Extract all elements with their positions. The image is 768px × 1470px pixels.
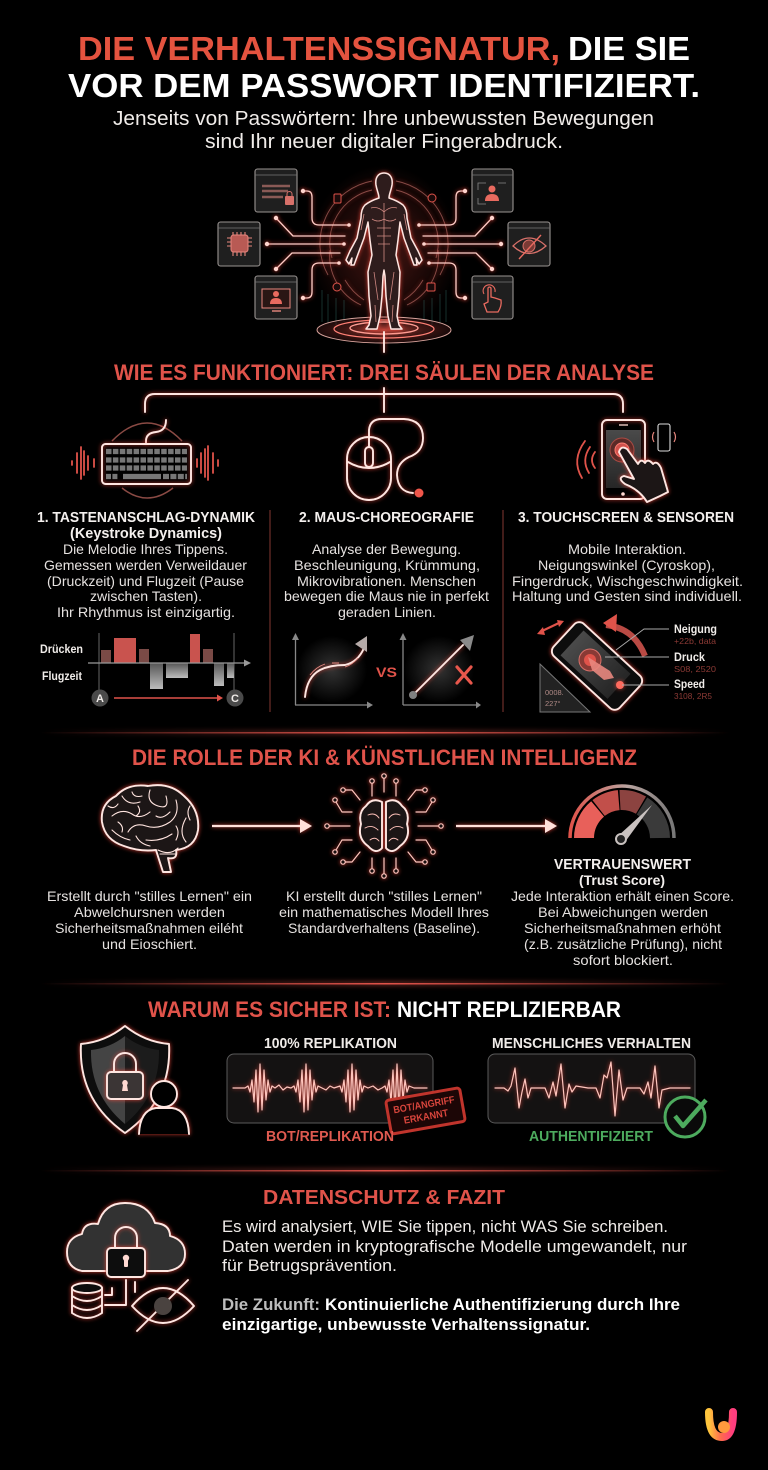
column text: Analyse der Bewegung.	[312, 541, 461, 557]
section divider	[40, 1168, 730, 1173]
chart: press and flight time: Flugzeit	[42, 671, 82, 683]
text: model: Standardverhaltens (Baseline).	[288, 920, 480, 936]
window: monitor with user	[255, 276, 297, 319]
bracket connector	[145, 388, 623, 412]
sensor labels: Neigung	[674, 624, 717, 636]
column text: Mikrovibrationen. Menschen	[297, 573, 476, 589]
text: conclusion: Kontinuierliche Authentifizierung durch Ihre	[325, 1296, 680, 1314]
text: score: sofort blockiert.	[573, 952, 673, 968]
window: chip	[218, 222, 260, 266]
label: replication: 100% REPLIKATION	[264, 1036, 397, 1052]
icon: tilted phone with sensors: 227°	[545, 699, 561, 708]
chart: press and flight time: A	[96, 693, 104, 705]
heading: why it is secure: WARUM ES SICHER IST:	[148, 997, 391, 1022]
column text: bewegen die Maus nie in perfekt	[284, 588, 489, 604]
icon: tilted phone with sensors	[537, 614, 669, 713]
column heading: (Keystroke Dynamics)	[70, 526, 222, 542]
chart: press and flight time: Drücken	[40, 644, 83, 656]
text: privacy: für Betrugsprävention.	[222, 1257, 397, 1275]
column text: Fingerdruck, Wischgeschwindigkeit.	[512, 573, 743, 589]
text: privacy: Daten werden in kryptografische Modelle umgewandelt, nur	[222, 1238, 688, 1256]
icon: brain	[102, 785, 198, 872]
left connectors	[267, 191, 348, 298]
stamp: bot attack detected: BOT/ANGRIFF	[393, 1095, 456, 1116]
connector dots	[265, 189, 503, 300]
heading: why it is secure	[148, 997, 621, 1022]
text: score	[511, 888, 734, 968]
column heading	[37, 510, 256, 542]
text: privacy	[222, 1218, 688, 1275]
text: score: Sicherheitsmaßnahmen erhöht	[524, 920, 721, 936]
icon: tilted phone with sensors: 0008.	[545, 688, 564, 697]
trust score heading	[554, 857, 691, 888]
label: human behaviour: MENSCHLICHES VERHALTEN	[492, 1036, 691, 1052]
text: conclusion: einzigartige, unbewusste Verhaltenssignatur.	[222, 1316, 590, 1334]
sensor labels: 3108, 2R5	[674, 691, 712, 701]
column text: zwischen Tasten).	[90, 588, 202, 604]
panel: AI role	[47, 774, 734, 968]
trust score heading: (Trust Score)	[579, 872, 665, 888]
text: privacy: Es wird analysiert, WIE Sie tippen, nicht WAS Sie schreiben.	[222, 1218, 668, 1236]
text: model	[279, 888, 489, 936]
chart: press and flight time: C	[231, 693, 239, 705]
heading: how it works: WIE ES FUNKTIONIERT: DREI SÄULEN DER ANALYSE	[114, 360, 654, 385]
panel: not replicable	[81, 1026, 706, 1145]
icon: sound waves	[72, 446, 218, 480]
icon: phone with touch	[577, 420, 676, 502]
chart: human waveform	[488, 1054, 695, 1123]
text: learning: Erstellt durch "stilles Lernen" ein	[47, 888, 252, 904]
text: learning: und Eioschiert.	[102, 936, 197, 952]
subtitle	[113, 108, 654, 153]
column heading: 3. TOUCHSCREEN & SENSOREN	[518, 510, 734, 526]
window: touch hand	[472, 276, 513, 319]
sensor labels: Speed	[674, 679, 705, 691]
window: crossed eye	[508, 222, 550, 266]
text: score: Jede Interaktion erhält einen Score.	[511, 888, 734, 904]
right connectors	[420, 191, 501, 298]
sensor labels: +22b, data	[674, 636, 716, 646]
text: learning: Abwelchursnen werden	[74, 904, 225, 920]
label: authenticated: AUTHENTIFIZIERT	[529, 1129, 653, 1145]
section divider	[40, 981, 730, 986]
orbit rings	[320, 181, 448, 305]
column divider	[270, 510, 503, 712]
icon: cloud lock database eye	[67, 1203, 194, 1331]
arrow	[212, 819, 312, 833]
panel: touchscreen and sensors	[512, 420, 743, 713]
text: score: Bei Abweichungen werden	[538, 904, 708, 920]
panel: mouse choreography	[284, 419, 489, 708]
heading: role of AI: DIE ROLLE DER KI & KÜNSTLICHEN INTELLIGENZ	[132, 745, 637, 770]
column text: Neigungswinkel (Cyroskop),	[538, 557, 715, 573]
column text: Mobile Interaktion.	[568, 541, 686, 557]
section divider	[40, 730, 730, 735]
text: conclusion	[222, 1296, 680, 1334]
panel: keystroke dynamics	[37, 420, 256, 706]
column text	[512, 541, 743, 604]
window: login with lock	[255, 169, 297, 212]
stamp: bot attack detected: ERKANNT	[403, 1108, 449, 1127]
column heading: 2. MAUS-CHOREOGRAFIE	[299, 510, 474, 526]
chart: human mouse curve	[292, 633, 373, 708]
icon: keyboard	[102, 420, 191, 498]
text: conclusion: Die Zukunft:	[222, 1296, 320, 1314]
icon: trust gauge	[570, 786, 674, 844]
stamp: bot attack detected	[386, 1088, 465, 1134]
connector down from platform	[383, 332, 385, 352]
column text	[284, 541, 489, 620]
heading: why it is secure: NICHT REPLIZIERBAR	[397, 997, 621, 1022]
heading: privacy and conclusion: DATENSCHUTZ & FAZIT	[263, 1187, 505, 1209]
column text: Beschleunigung, Krümmung,	[294, 557, 480, 573]
sensor labels: Druck	[674, 652, 706, 664]
title	[68, 30, 700, 104]
icon: AI neural brain	[325, 774, 443, 878]
sensor labels: S08, 2520	[674, 664, 716, 674]
column text: Haltung und Gesten sind individuell.	[512, 588, 742, 604]
subtitle: sind Ihr neuer digitaler Fingerabdruck.	[205, 131, 563, 153]
column text	[44, 541, 247, 620]
icon: green check	[665, 1097, 706, 1137]
label: bot replication: BOT/REPLIKATION	[266, 1129, 394, 1145]
column heading: 1. TASTENANSCHLAG-DYNAMIK	[37, 510, 256, 526]
title: DIE VERHALTENSSIGNATUR,	[78, 30, 560, 67]
text: model: KI erstellt durch "stilles Lernen"	[286, 888, 482, 904]
text: learning	[47, 888, 252, 952]
title: VOR DEM PASSWORT IDENTIFIZIERT.	[68, 67, 700, 104]
human figure	[346, 173, 422, 329]
chart: press and flight time	[40, 633, 251, 706]
chart: bot straight line	[400, 633, 481, 708]
platform	[317, 317, 451, 343]
logo	[709, 1412, 733, 1437]
column text: (Druckzeit) und Flugzeit (Pause	[47, 573, 244, 589]
icon: shield with lock and person	[81, 1026, 189, 1134]
icon: mouse	[347, 419, 424, 500]
title: DIE SIE	[568, 30, 690, 67]
column text: Ihr Rhythmus ist einzigartig.	[57, 604, 235, 620]
text: learning: Sicherheitsmaßnahmen eiléht	[55, 920, 243, 936]
chart: bot waveform	[227, 1054, 433, 1123]
text: score: (z.B. zusätzliche Prüfung), nicht	[524, 936, 722, 952]
hero: human body with connected windows	[218, 165, 550, 343]
sensor labels	[674, 624, 717, 701]
text: model: ein mathematisches Modell Ihres	[279, 904, 489, 920]
column text: Gemessen werden Verweildauer	[44, 557, 247, 573]
small ring icons	[333, 194, 436, 291]
column text: Die Melodie Ihres Tippens.	[63, 541, 228, 557]
trust score heading: VERTRAUENSWERT	[554, 857, 691, 873]
subtitle: Jenseits von Passwörtern: Ihre unbewussten Bewegungen	[113, 108, 654, 130]
label: VS: VS	[376, 664, 397, 680]
arrow	[456, 819, 557, 833]
column text: geraden Linien.	[338, 604, 436, 620]
window: user profile	[472, 169, 513, 212]
